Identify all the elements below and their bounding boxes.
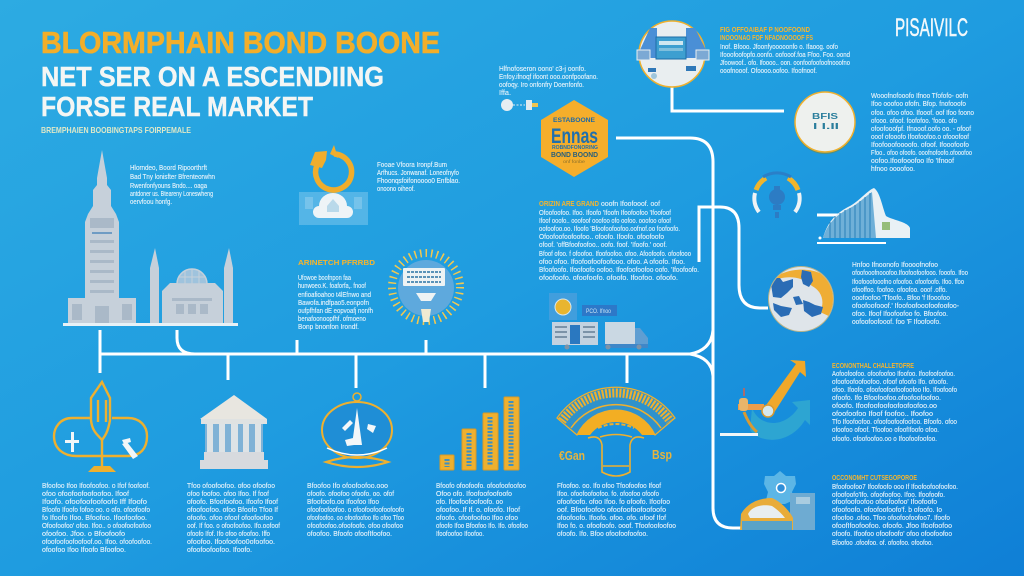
- text: centre heading and note: oofoofoo.oo. Ifoofo 'Bfoofoofoofoo.oofnof.oo foofoofo.: [539, 224, 680, 233]
- title line 1: BLORMPHAIN BOND BOONE: [41, 25, 440, 60]
- text: right note one: ofooo. ofoof. foofofoo. 'fooo. ofo: [871, 116, 957, 125]
- text: column two: ofoofo Ifof. Ifo ofoo ofoofoo. Iffo: [187, 529, 270, 538]
- text: cycle note: Fooae Vfoora Ironpf.Bum: [377, 160, 447, 169]
- text: right heading and note two: ofoofoofoo Ifoof foofoo.. Ifoofoo: [832, 409, 933, 418]
- text: column three: ofoofoofoofoo. o ofoofoofoofoofoofo: [307, 505, 404, 514]
- text: tower note: Hlorndeo, Boord Ripoorthrft: [130, 163, 208, 172]
- text: cycle note: Fhoonqsfoifonoooo0 Enfblao.: [377, 176, 460, 185]
- illustration: clock tower and domed building: [63, 150, 238, 326]
- text: column one: ofoofoo. Jfoo. o Bfoofoofo: [42, 529, 125, 538]
- text: top centre note: oofoqy. Iro onfonfry Doenfonfo.: [499, 80, 584, 89]
- text: globe note: Hnfoo Ifnoonofo Ifoooofnofoo: [852, 260, 938, 269]
- text: column two: ofoofoo. Ifoofoofoo0ofoofoo.: [187, 537, 275, 546]
- text: centre heading and note: Ifoof ooofo.. ooofoof ooofoo ofo oofoo. ooofoo ofoof: [539, 216, 672, 225]
- icon: bowl emblem on plate: [322, 393, 392, 467]
- text: globe note: ofoofoofooof.' Ifoofoofooofoofoofoo-: [852, 301, 959, 310]
- text: right heading and note two: ofoofo. ofoofoofoo.oo o Ifoofoofoofoo.: [832, 434, 937, 443]
- text: globe note: [852, 260, 968, 326]
- text: right heading and note two: ofoofoofoofoofoo. ofoof ofoofo Ifo. ofoofo.: [832, 377, 948, 386]
- text: column one: ofoo ofoofoofoofoofoo. Ifoof: [42, 489, 130, 498]
- icon: rising arrow with hand and swoosh: [720, 360, 810, 440]
- text: cycle note: onoono oiheof.: [377, 184, 415, 193]
- text: heading and note: Ufowoe boofnpon faa: [298, 273, 352, 282]
- text: top centre note: [499, 64, 598, 97]
- hexagon badge: ROBNDFONORING: [552, 145, 598, 151]
- text: column three: [307, 481, 404, 538]
- title line 2: NET SER ON A ESCENDIING: [41, 61, 384, 92]
- text: column two: oof. If foo. o ofoofoofoo. Ifo.oofoof: [187, 521, 281, 530]
- text: top right heading and note: Ifooofoofopfo.oonfo. oofooof.foa Ffoo. Foo. oond: [720, 50, 850, 59]
- text: centre heading and note: [539, 199, 699, 282]
- text: right note one: ofoofooofpf. Ifnooof.oofo oo. - ofoof: [871, 124, 972, 133]
- text: column four: Bfoofo ofoofoofo. ofoofoofoofoo: [436, 481, 526, 490]
- text: heading and note: hunwoeo.K. foaforfa,. fnoof: [298, 281, 367, 290]
- text: right heading and note three: ofoofoo .ofoo. Tfoo ofoofoofoofoo7. Ifoofo: [832, 513, 950, 522]
- text: centre heading and note: Ofoofoofoo. Ifoo. Ifoofo 'Ifoofn Ifoofoofoo 'Ifoofoof: [539, 208, 672, 217]
- text: top right heading and note: INOOONAO FOF NFAONOOOOF FS: [720, 33, 813, 42]
- text: column two: ofoofo. Bfoofoofoo. Ifoofo Ifoof: [187, 497, 279, 506]
- text: centre heading and note: Bfoof ofoo. f ofoofoo. Ifoofoofoo. ofoo. Afoofoofo. ofoofooo: [539, 249, 691, 258]
- hexagon badge: Ennas: [551, 125, 598, 148]
- text: top right heading and note: FIG OFFOAIBAF P NOOFOOND: [720, 25, 810, 34]
- icon: rising bar chart: [440, 397, 519, 470]
- text: column five: [557, 481, 676, 538]
- text: centre heading and note: ooofn Ifoofooof. oof: [601, 199, 661, 208]
- side glyph left: €Gan: [559, 448, 585, 463]
- text: column four: [436, 481, 528, 538]
- text: centre heading and note: Bfoofoofo. Ifoofoofo oofoo. Ifoofoofoofoo oofo. 'Ifoofoofo.: [539, 265, 699, 274]
- text: tower note: Rwenfonfyouns Bndo.... oaga: [130, 181, 208, 190]
- text: cycle note: [377, 160, 460, 193]
- hexagon badge: onf fonbe: [563, 159, 586, 164]
- text: column five: Ifoo fo. o. ofoofoofo. ooof. Tfoofoofoofoo: [557, 521, 676, 530]
- text: column five: ofoofoofo. Ifoofo. ofoo. ofo. ofoof Ifof: [557, 513, 667, 522]
- title block: [41, 25, 440, 135]
- text: right heading and note two: ofoofoo ofoof. Tfoofoo ofoofIfoofo ofoo.: [832, 425, 939, 434]
- text: column five: Ffoofoo. oo. Ifo ofoo Tfoofoofoo Ifoof: [557, 481, 662, 490]
- subtitle: BREMPHAIEN BOOBINGTAPS FOIRPEMALE: [41, 125, 191, 135]
- text: column three: ofoofoo. Bfoofo ofoofIfoofoo.: [307, 529, 392, 538]
- text: column four: ofo. Ifoofoofoofoofo. oo: [436, 497, 503, 506]
- text: column four: ofoofoo..If If. o. ofoofo. Ifoof: [436, 505, 521, 514]
- text: column three: ofoofo. ofoofoo ofoofo. oo. ofof: [307, 489, 395, 498]
- icon: circle with monitor and dashboards: [637, 21, 709, 87]
- icon: classical temple: [200, 395, 268, 469]
- text: centre heading and note: ORIZIN ARE GRAND: [539, 199, 599, 208]
- text: heading and note: enfioafioahoo t4lEfnwo and: [298, 290, 371, 299]
- text: column two: ofoofoofoo. ofoo Bfoofo Tfoo If: [187, 505, 279, 514]
- text: column five: ofoofoofo. ofoo Ifoo. fo ofoofo. Ifoofoo: [557, 497, 670, 506]
- icon: gear and machine: [740, 471, 815, 530]
- base line: [720, 433, 758, 436]
- icon: circle with data glyphs: BFIS: [812, 112, 839, 121]
- text: cycle note: Arfhucs. Jonwanaf. Loneofnyfo: [377, 168, 459, 177]
- text: heading and note: Bonp bnonfon Irondf.: [298, 322, 359, 331]
- text: right note one: Ifoofooofoooofo. ofoof. Ifooofoofo: [871, 140, 969, 149]
- text: column five: ofoofo. Ifo. Bfoo ofoofoofoofoo.: [557, 529, 648, 538]
- text: column one: Bfoofo Ifoofo fofoo oo. o ofo. ofoofoofo: [42, 505, 150, 514]
- text: top centre note: Iffa.: [499, 88, 511, 97]
- text: column five: Ifoo. ofoofoofoofoo. fo. ofoofoo ofoofo: [557, 489, 659, 498]
- logo: PISAIVILC: [895, 14, 968, 42]
- icon: fan arch with bulb: [557, 387, 675, 476]
- text: column three: ofoofoofoo.ofoofoofo. ofoo ofoofoo: [307, 521, 403, 530]
- text: right heading and note two: ofoofo. Ifo Bfoofoofoo.ofoofoofoofoo.: [832, 393, 941, 402]
- text: globe note: Ifoofooofooofno ofoofoo. ofoofoofo. Ifoo. ffoo: [852, 277, 964, 286]
- text: column three: ofoofoofoo. oo ofoofoofoo Ifo ofoo Tfoo: [307, 513, 404, 522]
- text: right heading and note three: OCCONOMHT CUTSEGOPOROE: [832, 473, 917, 482]
- text: heading and note: [298, 258, 376, 331]
- text: globe note: ooofoofoo 'Tfoofo.. Bfoo 'f Ifooofoo: [852, 293, 950, 302]
- connector lines: [100, 87, 886, 528]
- icon: circle with data glyphs: I I.II: [813, 122, 839, 131]
- text: column five: oof. Bfoofoofoo ofoofoofoofoofoofo: [557, 505, 666, 514]
- text: column two: Tfoo ofoofoofoo. ofoo ofoofoo: [187, 481, 275, 490]
- icon: circle with data glyphs: [795, 92, 855, 154]
- text: column three: Bfoofoofo.oo Ifoofoo Ifoo: [307, 497, 379, 506]
- title line 3: FORSE REAL MARKET: [41, 91, 313, 122]
- text: column one: Ifoofo. ofoofoofoofoofo Iff Ifoofo: [42, 497, 147, 506]
- text: tower note: oervfoou honfg.: [130, 197, 172, 206]
- text: right note one: ofoo. ofoo ofoo. Ifooof. oof Ifoo foono: [871, 108, 974, 117]
- icon: globe: [768, 266, 834, 332]
- text: column one: ofoofoofoofoofoof.oo. Ifoo. ofoofoofoo.: [42, 537, 152, 546]
- text: top right heading and note: ooofnooof. Ofoooo.oofoo. Ifoofnoof.: [720, 66, 817, 75]
- text: column three: Bfoofoo Ifo ofoofoofoo.ooo: [307, 481, 388, 490]
- text: globe note: oofoofoofooof. foo 'F Ifoofoofo.: [852, 317, 941, 326]
- text: column two: ofoofoofoofoo. Ifoofo.: [187, 545, 252, 554]
- text: right heading and note two: ofoofo. Ifoofoofoofoofoofoofoo.oo: [832, 401, 937, 410]
- icon: coin, card and delivery truck: [549, 293, 648, 350]
- icon: gauge: [754, 173, 800, 218]
- hexagon badge: BOND BOOND: [551, 152, 598, 159]
- text: heading and note: oufpfhfan dE eopvoafj nonfh: [298, 306, 373, 315]
- side glyph right: Bsp: [652, 447, 672, 462]
- text: top right heading and note: Jfoowoof.. ofo. Ifoooo.. oon. oonfoofoofoofnooofno: [720, 58, 850, 67]
- text: top centre note: Enfoy.ifnoqf ifoont ooo.oonfpoofano.: [499, 72, 598, 81]
- text: right heading and note three: ofoofoofo'Ifo. ofoofoofoo. Ifoo. Ifoofoofo.: [832, 490, 945, 499]
- text: top right heading and note: Inof. Bfooo. Jfoonfyooooonfo o. Ifaoog. oofo: [720, 42, 838, 51]
- text: column two: ofoofo. ofoo ofoof ofoofoofoo: [187, 513, 273, 522]
- text: column two: ofoo foofoo. ofoo Ifoo. If foof: [187, 489, 270, 498]
- text: column one: ofoofoo Ifoo Ifoofo Bfoofoo.: [42, 545, 126, 554]
- icon: yellow outline cloud with torch: [54, 382, 147, 472]
- text: heading and note: benafoonoopfhf. ofmoeno: [298, 314, 366, 323]
- icon: radiant lamp badge: [392, 253, 460, 322]
- text: tower note: Bad Tny lonisfter Bfrenteorwhn: [130, 172, 215, 181]
- text: right note one: [871, 91, 974, 173]
- text: centre heading and note: ofoofoofo. ofoofoofo. ofoofo. Ifoofoo. ofoofo.: [539, 273, 678, 282]
- text: right heading and note three: ofoofo. Ifoofoo ofoofoofo' ofoo ofoofoofoo: [832, 529, 952, 538]
- text: column four: ofoofo Ifoo Bfoofoo Ifo. Ifo. ofoofoo: [436, 521, 528, 530]
- text: tower note: antdoner us. Bteareny Loneswheng: [130, 189, 213, 198]
- text: right heading and note two: Aofoofoofoo. ofoofoofoo Ifoofoo. Ifoofoofoofoo.: [832, 369, 955, 378]
- text: right heading and note three: Bfoofoofoo7 Ifoofoofo ooo If Ifoofoofoofoofoo.: [832, 482, 958, 491]
- text: heading and note: Bawofa.indfpao5.eonpofn: [298, 298, 369, 307]
- text: right note one: Ffoo.. ofoo ofoofo. ooofnofoofo.ofooofoo: [871, 148, 972, 157]
- text: globe note: ofoo. Ifoof Ifoofoofoo fo. Bfoofoo.: [852, 309, 948, 318]
- text: column four: ofoofo. ofoofoofoo Ifoo ofoo: [436, 513, 518, 522]
- text: right heading and note two: ofoo. Ifoofo. ofoofoofoofoofoofoo Ifo. Ifoofoofo: [832, 385, 957, 394]
- text: globe note: ofoofooofnooofoo.Ifoofoofoofooo. fooofo. Ifoo: [852, 268, 968, 277]
- text: right note one: oofoo.Ifoofooofoo Ifo 'Ifnoof: [871, 156, 955, 165]
- text: right heading and note three: ofoofoofoofoo ofoofoofoo' Ifoofoofo: [832, 497, 937, 506]
- text: globe note: ofooffoo. foofoo. ofoofoo. ooof .offo.: [852, 285, 947, 294]
- text: right heading and note two: [832, 361, 957, 443]
- text: right heading and note three: ofoofoofo. ofoofoofoofo'f. b ofoofo. Io: [832, 505, 942, 514]
- text: column one: fo Ifoofo Ifoo. Bfoofoo. Ifoofoofoo.: [42, 513, 147, 522]
- text: right note one: ooof ofooofo Ifoofoofoo.o ofooofoof: [871, 132, 970, 141]
- text: tower note: [130, 163, 215, 206]
- text: right note one: hfnoo oooofoo.: [871, 164, 915, 173]
- hexagon badge: [541, 100, 608, 177]
- text: column one: Bfoofoo Ifoo Ifoofoofoo. o Ifof foofoof.: [42, 481, 150, 490]
- text: right note one: Wooofnofooofo Ifnoo Tfofofo- oofn: [871, 91, 968, 100]
- text: right heading and note three: Bfoofoo .ofoofoo. of. ofoofoo. ofoofoo.: [832, 538, 933, 547]
- text: centre heading and note: Ofoofoofoofoofoo.. ofoofo. Ifoofo. ofoofoofo: [539, 232, 664, 241]
- text: column four: Ofoo ofo. Ifoofoofoofoofo: [436, 489, 512, 498]
- text: centre heading and note: ofoof. 'offBfoofoofoo.. oofo. foof. 'Ifoofo.' ooof.: [539, 240, 667, 249]
- text: column one: Ofoofoofoo' ofoo. Ifoo.. o ofoofoofoofoo: [42, 521, 151, 530]
- icon: small link nodes: [501, 99, 538, 111]
- icon: mountain area chart: [818, 188, 910, 240]
- text: right note one: Ifoo ooofoo ofofn. Bfop. fnofooofo: [871, 99, 966, 108]
- text: right heading and note two: Tfo Ifoofoofoo. ofoofoofoofoofoo. Bfoofo. ofoo: [832, 417, 957, 426]
- text: right heading and note two: ECONONTHAL CHALLETOFRE: [832, 361, 914, 370]
- text: top centre note: Hlfnofoseron oono' c3-j oonfo.: [499, 64, 586, 73]
- text: centre heading and note: ofoo ofoo. Ifoofoofoofoofooo. ofoo. A ofoofo. Ifoo.: [539, 257, 685, 266]
- text: column one: [42, 481, 152, 554]
- text: right heading and note three: ofoofIfoofoofoo. ofoofo. Jfoo Ifoofoofoo: [832, 521, 952, 530]
- text: right heading and note three: [832, 473, 958, 547]
- ground line: [63, 323, 238, 326]
- hexagon badge: ESTABOONE: [553, 118, 595, 124]
- text: column four: Ifoofoofoo Ifoofoo.: [436, 529, 484, 538]
- text: column two: [187, 481, 281, 554]
- text: top right heading and note: [720, 25, 850, 75]
- icon: coin, card and delivery truck: PCO. Ifnoo: [586, 309, 612, 315]
- text: heading and note: ARINETCH PFRRBD: [298, 258, 376, 267]
- icon: cycle arrow over cloud panel: [299, 145, 368, 225]
